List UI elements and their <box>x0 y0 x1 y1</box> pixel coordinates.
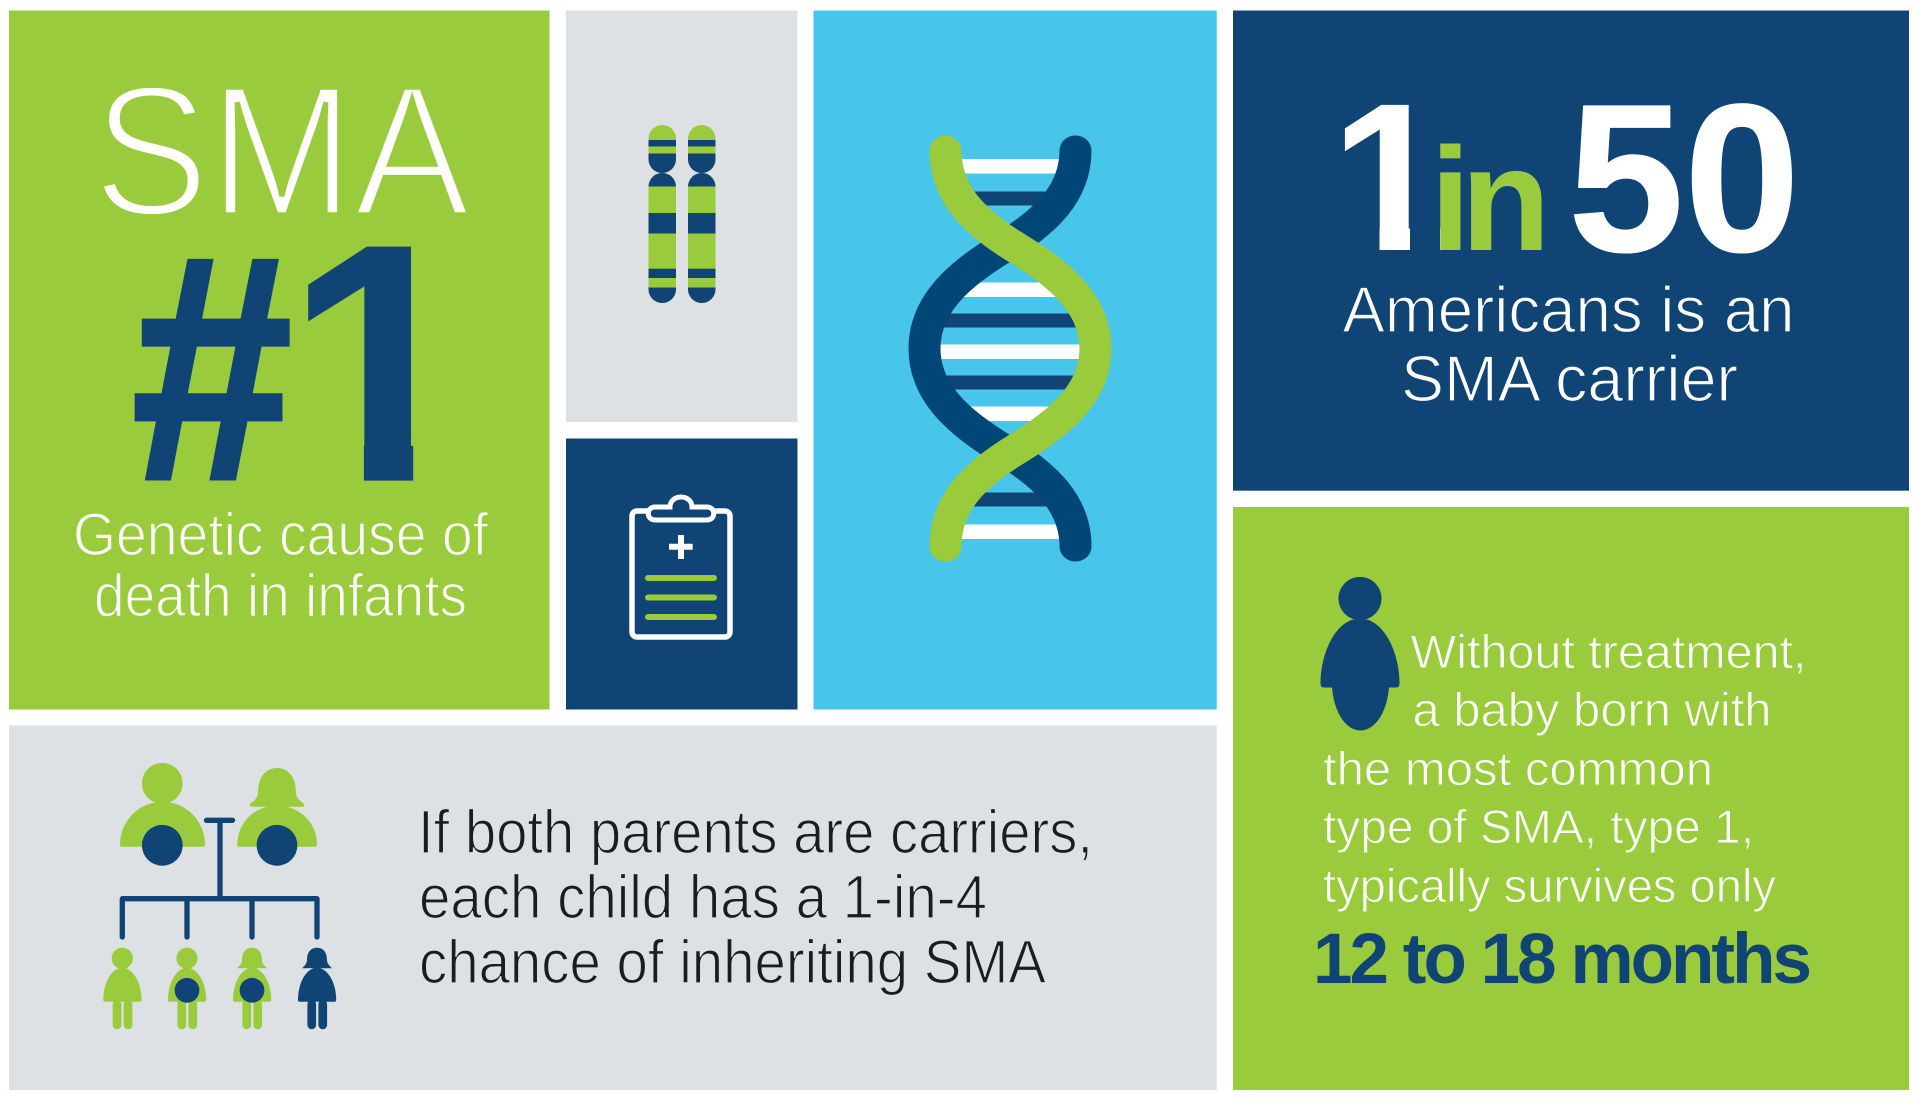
icon: family tree <box>103 763 336 1029</box>
text: without treatment: type of SMA, type 1, <box>1323 800 1754 853</box>
icon: child, carrier girl <box>233 948 271 1029</box>
panel: 1 in 50 carriers <box>1233 10 1909 491</box>
text: Americans is an SMA carrier: SMA carrier <box>1401 342 1738 415</box>
icon: clipboard <box>632 497 730 637</box>
panel: inheritance <box>9 726 1217 1090</box>
stat: 1 in 50: 1 <box>1330 59 1448 295</box>
panel: survival without treatment <box>1233 507 1909 1090</box>
icon: right chromosome <box>687 125 716 304</box>
text: genetic cause of death in infants: death in infants <box>94 562 467 629</box>
icon: father <box>120 763 205 866</box>
text: inheritance risk <box>418 798 1093 996</box>
icon: baby <box>1320 577 1400 730</box>
panel: DNA <box>814 10 1217 710</box>
text: inheritance risk: each child has a 1-in-4 <box>419 863 987 931</box>
stat: 12 to 18 months: 12 to 18 months <box>1313 920 1812 999</box>
big number: #1: # <box>132 191 292 546</box>
text: inheritance risk: chance of inheriting SMA <box>419 928 1046 996</box>
text: without treatment: typically survives only <box>1323 859 1776 912</box>
panel: SMA number one genetic cause <box>9 10 550 710</box>
panel: chromosome <box>566 10 798 422</box>
stat: 1 in 50: in <box>1430 118 1542 282</box>
stat: 1 in 50 <box>1330 59 1800 296</box>
text: without treatment: a baby born with <box>1412 683 1772 736</box>
text: without treatment <box>1323 625 1806 912</box>
panel: clipboard <box>566 438 798 710</box>
text: without treatment: the most common <box>1323 742 1713 795</box>
text: Americans is an SMA carrier <box>1342 273 1794 415</box>
text: inheritance risk: If both parents are carriers, <box>418 798 1093 866</box>
icon: left chromosome <box>648 125 677 304</box>
stat: 1 in 50: 50 <box>1568 60 1800 296</box>
icon: DNA double helix <box>924 136 1096 562</box>
icon: child, unaffected boy <box>103 948 142 1029</box>
icon: child, carrier boy <box>168 948 206 1029</box>
tree connector lines <box>122 820 317 937</box>
text: without treatment: Without treatment, <box>1410 625 1806 678</box>
text: genetic cause of death in infants: Genetic cause of <box>73 501 488 568</box>
icon: mother <box>237 768 317 866</box>
big number: #1: 1 <box>285 174 474 554</box>
text: genetic cause of death in infants <box>73 501 488 629</box>
big number: #1 <box>132 174 475 554</box>
text: Americans is an SMA carrier: Americans is an <box>1342 273 1794 346</box>
icon: child, affected girl <box>298 948 336 1029</box>
heading: SMA: SMA <box>93 48 470 255</box>
